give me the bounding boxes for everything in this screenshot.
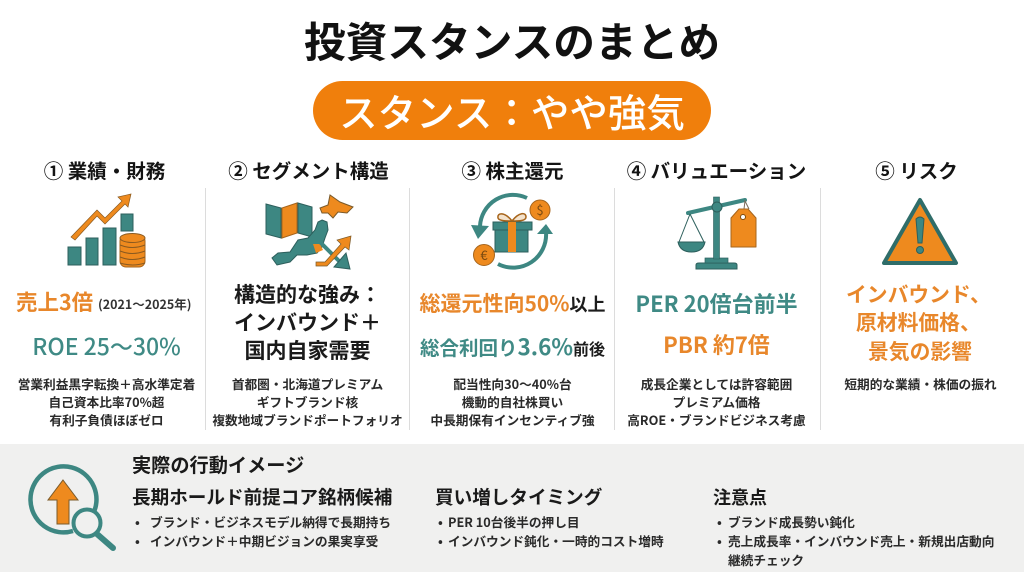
metric: ROE: ROE 25〜30% [32,328,181,362]
icon: map of Japan with arrows [266,194,354,270]
panel: バリュエーション [627,155,806,429]
details: 株主還元: 中長期保有インセンティブ強 [430,410,595,429]
metric: PBR: PBR 約7倍 [663,328,770,360]
bullets: 長期ホールド: インバウンド＋中期ビジョンの果実享受 [150,531,378,550]
panel: リスク [844,155,997,393]
block: 注意点 [713,484,994,569]
block: 買い増しタイミング: • [438,531,443,550]
details: 株主還元: 配当性向30〜40%台 [453,374,572,393]
panel: 業績・財務 [16,155,195,429]
icon: warning triangle [882,198,958,265]
panel: 実際の行動イメージ [0,444,1024,572]
icon: gift with circular arrows and coins [471,192,553,270]
details: 業績: 自己資本比率70%超 [48,392,164,411]
details: 業績: 営業利益黒字転換＋高水準定着 [18,374,195,393]
bullets: 注意点: 売上成長率・インバウンド売上・新規出店動向 [728,531,994,550]
details: 業績 [18,374,195,429]
icon: magnifier with up arrow [28,464,116,551]
details: セグメント: 複数地域ブランドポートフォリオ [212,410,403,429]
heading: バリュエーション: ④ バリュエーション [627,155,806,184]
details: セグメント: ギフトブランド核 [257,392,358,411]
block: 買い増しタイミング: • [438,512,443,531]
note: period: (2021〜2025年) [98,294,191,313]
heading: 株主還元: ③ 株主還元 [462,155,563,184]
details: バリュエーション: 高ROE・ブランドビジネス考慮 [627,410,806,429]
headline: インバウンド risk lines: インバウンド、 [846,278,991,308]
details: セグメント: 首都圏・北海道プレミアム [232,374,383,393]
headline: 構造的な強み [234,279,381,365]
headline: 構造的な強み: インバウンド＋ [234,307,381,337]
icon: growth chart and coins [68,194,146,268]
panel: 株主還元 [419,155,606,429]
bullets: 買い増しタイミング [438,512,664,550]
heading: 業績・財務: ① 業績・財務 [44,155,165,184]
headline: インバウンド risk lines: 原材料価格、 [856,306,981,336]
block: 注意点: • [717,512,722,531]
icon: gift with circular arrows and coins: $ [536,200,544,219]
subheading: 注意点: 注意点 [713,484,767,510]
heading: 実際の行動イメージ: 実際の行動イメージ [132,450,304,478]
headline: 構造的な強み: 国内自家需要 [244,335,370,365]
block: 長期ホールド [132,483,392,550]
bullets: 買い増しタイミング: PER 10台後半の押し目 [448,512,580,531]
bullets: 注意点: 継続チェック [728,550,804,569]
details: 業績: 有利子負債ほぼゼロ [49,410,164,429]
details: 株主還元 [430,374,595,429]
block: 長期ホールド: • [135,512,140,531]
block: 注意点: • [717,531,722,550]
headline: インバウンド risk lines [846,278,991,365]
block: 買い増しタイミング [435,483,664,550]
details: セグメント [212,374,403,429]
headline: インバウンド risk lines: 景気の影響 [868,335,972,365]
heading: リスク: ⑤ リスク [875,155,958,184]
subheading: 買い増しタイミング: 買い増しタイミング [435,483,602,510]
details: 株主還元: 機動的自社株買い [462,392,563,411]
details: バリュエーション [627,374,806,429]
panel: セグメント構造 [212,155,403,429]
heading: セグメント構造: ② セグメント構造 [228,155,389,184]
metric: 売上3倍: 売上3倍 [16,286,93,317]
headline: 構造的な強み: 構造的な強み： [234,279,381,309]
bullets: 長期ホールド: ブランド・ビジネスモデル納得で長期持ち [150,512,391,531]
bullets: 買い増しタイミング: インバウンド鈍化・一時的コスト増時 [448,531,664,550]
subheading: 長期ホールド: 長期ホールド前提コア銘柄候補 [132,483,392,510]
stance badge: スタンス：やや強気 [339,83,685,139]
metric: 総還元性向: 総還元性向50%以上 [419,288,606,318]
title: 投資スタンスのまとめ [304,10,720,70]
bullets: 注意点 [717,512,994,569]
block: 長期ホールド: • [135,531,140,550]
metric: PER: PER 20倍台前半 [635,287,798,319]
metric: 総合利回り: 総合利回り3.6%前後 [420,330,605,362]
details: リスク: 短期的な業績・株価の振れ [844,374,997,393]
bullets: 長期ホールド [135,512,391,550]
icon: scale with price tag [677,196,756,270]
icon: gift with circular arrows and coins: € [480,245,488,264]
details: バリュエーション: 成長企業としては許容範囲 [641,374,792,393]
details: バリュエーション: プレミアム価格 [673,392,760,411]
bullets: 注意点: ブランド成長勢い鈍化 [728,512,855,531]
